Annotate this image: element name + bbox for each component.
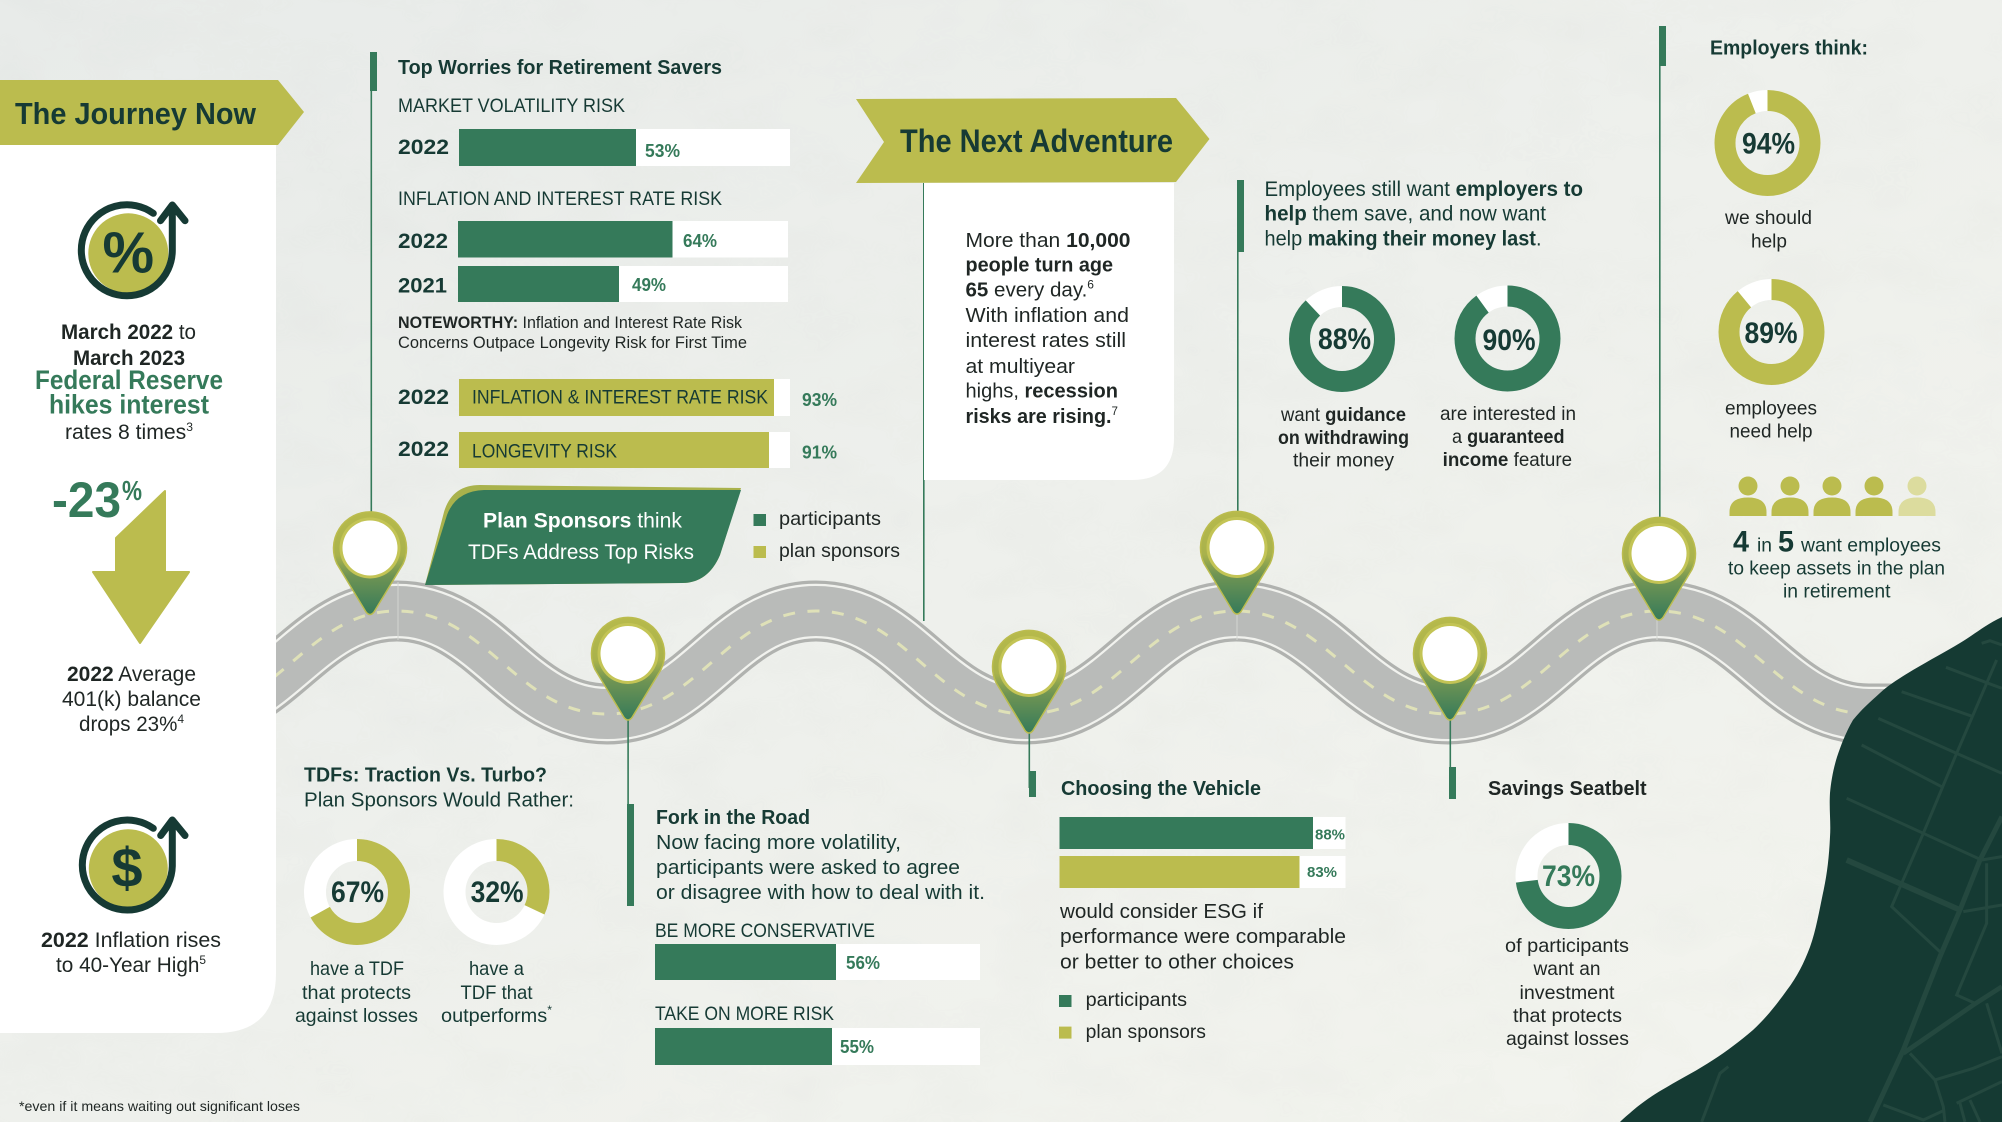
callout: plan sponsors think: TDFs Address Top Risks <box>468 541 694 564</box>
text: 401(k) balance: 401(k) balance <box>62 688 201 711</box>
text: inflation: 2022 Inflation rises <box>41 929 221 952</box>
legend: participants <box>779 508 881 530</box>
footnote: *even if it means waiting out significant loses <box>19 1098 300 1114</box>
text: inflation: to 40-Year High <box>56 954 201 977</box>
text: have a TDF that outperforms: TDF that <box>460 982 533 1004</box>
text: federal reserve hikes: March 2022 to <box>61 321 196 344</box>
chart: plan sponsors risks: 2022 <box>398 385 449 409</box>
text: employees need help: need help <box>1730 420 1813 442</box>
text: employees want help <box>1264 177 1583 250</box>
donut: 73%: 73% <box>1542 860 1595 893</box>
chart: inflation and interest rate risk: 2022 <box>398 229 448 253</box>
map pin 2 <box>592 617 664 720</box>
text: 4 in 5 <box>1728 526 1945 602</box>
connector: fork in the road <box>627 715 634 906</box>
banner: The Next Adventure: The Next Adventure <box>900 123 1173 159</box>
callout: plan sponsors think <box>425 485 741 585</box>
text: 10,000 people turn 65: 65 every day. <box>966 278 1087 302</box>
icon: percent rising <box>81 205 185 296</box>
icon: percent rising: % <box>103 220 154 286</box>
text: of participants want: against losses <box>1506 1028 1629 1050</box>
text: of participants want: of participants <box>1505 935 1629 957</box>
icon: down arrow <box>93 491 189 643</box>
note: noteworthy: Concerns Outpace Longevity Risk for First Time <box>398 334 747 352</box>
dark map corner <box>1620 617 2002 1122</box>
donut: 94% <box>1725 100 1810 186</box>
panel: employers think <box>1710 38 1945 603</box>
text: would consider ESG: would consider ESG if <box>1059 901 1263 923</box>
heading and intro: or disagree with how to deal with it. <box>656 882 985 904</box>
donut: 32%: 32% <box>471 876 524 909</box>
heading and intro: participants were asked to agree <box>656 857 960 879</box>
text: guaranteed income: income feature <box>1443 449 1572 471</box>
chart: inflation and interest rate risk: 2021 <box>398 274 447 298</box>
chart: plan sponsors risks <box>398 379 837 468</box>
chart: take on more risk: TAKE ON MORE RISK <box>655 1003 834 1025</box>
text: employees want help: Employees still want employers to <box>1264 177 1583 201</box>
chart: inflation and interest rate risk: 49% <box>632 275 666 295</box>
chart: market volatility risk <box>398 95 790 166</box>
donut: 89%: 89% <box>1744 317 1798 350</box>
heading: Top Worries for Retirement Savers <box>398 57 722 79</box>
stat: -23%: % <box>122 475 142 506</box>
panel: fork in the road <box>655 807 985 1065</box>
map pin 4 <box>1200 511 1274 614</box>
heading: Employers think: <box>1710 38 1868 60</box>
map pin 6 <box>1622 517 1696 620</box>
text: federal reserve hikes: Federal Reserve <box>35 365 223 395</box>
donut: 73% <box>1526 834 1610 918</box>
heading <box>304 764 574 812</box>
text: 401(k) balance: drops 23% <box>79 713 179 736</box>
chart: take on more risk: 55% <box>840 1037 874 1057</box>
text: 10,000 people turn 65: risks are rising. <box>966 405 1112 428</box>
donut: 32% <box>454 850 538 934</box>
text: employees need help <box>1725 398 1817 442</box>
text: of participants want: want an <box>1533 958 1600 980</box>
note: noteworthy <box>398 314 747 352</box>
legend <box>1059 989 1206 1043</box>
text: have a TDF that protects: against losses <box>295 1005 418 1027</box>
text: inflation: 5 <box>199 953 206 967</box>
chart: ESG consideration <box>1060 817 1346 888</box>
text: have a TDF that outperforms: * <box>547 1003 552 1017</box>
text: want guidance: want guidance <box>1280 404 1406 426</box>
chart: be more conservative: 56% <box>846 953 880 973</box>
panel: savings seatbelt <box>1488 778 1647 1050</box>
text: want guidance: on withdrawing <box>1278 427 1409 449</box>
panel: employees still want help <box>1264 177 1583 472</box>
chart: plan sponsors risks: 91% <box>802 442 837 462</box>
panel: the journey now <box>0 80 304 1033</box>
donut: 90% <box>1465 296 1550 381</box>
text: 4 in 5: to keep assets in the plan <box>1728 558 1945 580</box>
text: of participants want: investment <box>1520 982 1615 1004</box>
text: 10,000 people turn 65: 7 <box>1112 404 1118 418</box>
text: of participants want: that protects <box>1513 1005 1622 1027</box>
legend <box>754 508 900 562</box>
text: 10,000 people turn 65: at multiyear <box>966 355 1075 378</box>
banner: The Journey Now <box>0 80 304 145</box>
text: 10,000 people turn 65: With inflation and <box>966 304 1129 327</box>
winding road <box>186 611 1920 714</box>
text: federal reserve hikes: rates 8 times <box>65 421 185 444</box>
text: federal reserve hikes: hikes interest <box>49 390 209 420</box>
chart: inflation and interest rate risk: 64% <box>683 231 717 251</box>
chart: plan sponsors risks: 2022 <box>398 437 449 461</box>
text: federal reserve hikes <box>35 321 223 444</box>
white card <box>924 183 1174 480</box>
heading: Savings Seatbelt <box>1488 778 1647 800</box>
text: 10,000 people turn 65: highs, recession <box>966 380 1118 402</box>
donut: 67% <box>315 850 399 934</box>
callout: plan sponsors think: Plan Sponsors think <box>483 510 682 532</box>
donut: 67%: 67% <box>331 876 384 909</box>
chart: ESG consideration: 83% <box>1307 864 1337 881</box>
chart: take on more risk <box>655 1003 980 1065</box>
chart: market volatility risk: 2022 <box>398 135 449 159</box>
chart: market volatility risk: 53% <box>645 141 680 161</box>
map pin 3 <box>992 630 1066 733</box>
text: we should help <box>1724 207 1812 252</box>
connector: next adventure <box>923 183 925 621</box>
white panel background <box>0 145 276 1033</box>
icon: five people <box>1730 476 1936 516</box>
text: 10,000 people turn 65 <box>966 229 1130 428</box>
panel: top worries <box>398 57 900 585</box>
banner: The Journey Now: The Journey Now <box>15 96 257 131</box>
chart: be more conservative: BE MORE CONSERVATIVE <box>655 920 875 942</box>
text: of participants want <box>1505 935 1629 1050</box>
legend: plan sponsors <box>1086 1021 1206 1043</box>
heading and intro: Fork in the Road <box>656 807 810 829</box>
text: 10,000 people turn 65: people turn age <box>966 254 1113 277</box>
chart: inflation and interest rate risk <box>398 188 788 302</box>
panel: TDFs traction vs turbo <box>295 764 574 1027</box>
text: have a TDF that protects: that protects <box>302 982 411 1004</box>
banner: The Next Adventure <box>856 98 1210 183</box>
heading and intro <box>656 807 985 904</box>
text: guaranteed income <box>1440 403 1576 471</box>
text: we should help: we should <box>1724 207 1812 229</box>
text: 10,000 people turn 65: 6 <box>1087 278 1094 292</box>
text: 401(k) balance <box>62 663 201 736</box>
text: federal reserve hikes: March 2023 <box>73 347 185 370</box>
donut: 90%: 90% <box>1482 324 1536 357</box>
chart: inflation and interest rate risk: INFLATION AND INTEREST RATE RISK <box>398 188 722 210</box>
text: have a TDF that outperforms <box>441 958 552 1027</box>
connector: choosing the vehicle <box>1028 728 1036 797</box>
text: 4 in 5: 5 <box>1778 526 1794 559</box>
chart: plan sponsors risks: LONGEVITY RISK <box>472 440 617 462</box>
text: would consider ESG: performance were comparable <box>1060 926 1346 948</box>
text: want guidance <box>1278 404 1409 472</box>
donut: 89% <box>1729 290 1814 374</box>
connector: savings seatbelt <box>1449 715 1456 799</box>
heading: Choosing the Vehicle <box>1061 778 1261 800</box>
text: have a TDF that protects: have a TDF <box>310 958 404 980</box>
text: 10,000 people turn 65: interest rates still <box>966 329 1126 352</box>
connector: employers <box>1659 26 1666 519</box>
chart: ESG consideration: 88% <box>1315 827 1345 844</box>
donut: 88% <box>1300 296 1384 382</box>
connector: top worries <box>370 52 377 514</box>
chart: market volatility risk: MARKET VOLATILITY RISK <box>398 95 625 117</box>
heading: TDFs: Traction Vs. Turbo? <box>304 764 547 786</box>
text: would consider ESG <box>1059 901 1346 974</box>
text: inflation <box>41 929 221 977</box>
chart: plan sponsors risks: INFLATION & INTEREST RATE RISK <box>472 386 768 408</box>
text: 4 in 5: 4 <box>1733 526 1749 559</box>
note: noteworthy: NOTEWORTHY: Inflation and Interest Rate Risk <box>398 314 743 332</box>
text: federal reserve hikes: 3 <box>186 420 193 434</box>
stat: -23%: -23 <box>52 472 121 528</box>
text: guaranteed income: a guaranteed <box>1452 426 1564 448</box>
text: 401(k) balance: 4 <box>177 712 184 726</box>
text: 10,000 people turn 65: More than 10,000 <box>966 229 1130 252</box>
text: employees want help: help making their money last. <box>1264 226 1542 250</box>
panel: the next adventure <box>856 98 1210 480</box>
legend: plan sponsors <box>779 540 900 562</box>
text: have a TDF that protects <box>295 958 418 1027</box>
text: 4 in 5: want employees <box>1800 535 1941 557</box>
map pin 1 <box>334 512 406 614</box>
text: would consider ESG: or better to other choices <box>1060 952 1294 974</box>
chart: plan sponsors risks: 93% <box>802 390 837 410</box>
text: we should help: help <box>1751 230 1787 252</box>
panel: choosing the vehicle <box>1059 778 1346 1043</box>
text: 4 in 5: in <box>1757 535 1772 557</box>
heading: Plan Sponsors Would Rather: <box>304 790 574 812</box>
text: employees want help: help them save, and now want <box>1264 202 1546 226</box>
text: employees need help: employees <box>1725 398 1817 420</box>
icon: dollar rising <box>82 820 185 910</box>
chart: be more conservative <box>655 920 980 980</box>
donut: 88%: 88% <box>1318 323 1371 356</box>
text: want guidance: their money <box>1293 450 1394 472</box>
map pin 5 <box>1414 617 1486 720</box>
text: have a TDF that outperforms: have a <box>469 958 524 980</box>
legend: participants <box>1086 989 1187 1011</box>
text: have a TDF that outperforms: outperforms <box>441 1005 545 1027</box>
icon: dollar rising: $ <box>111 836 143 899</box>
text: 401(k) balance: 2022 Average <box>67 663 196 686</box>
text: guaranteed income: are interested in <box>1440 403 1576 425</box>
donut: 94%: 94% <box>1742 127 1795 160</box>
heading and intro: Now facing more volatility, <box>656 832 901 854</box>
text: 4 in 5: in retirement <box>1783 580 1891 602</box>
connector: employees <box>1237 180 1244 513</box>
